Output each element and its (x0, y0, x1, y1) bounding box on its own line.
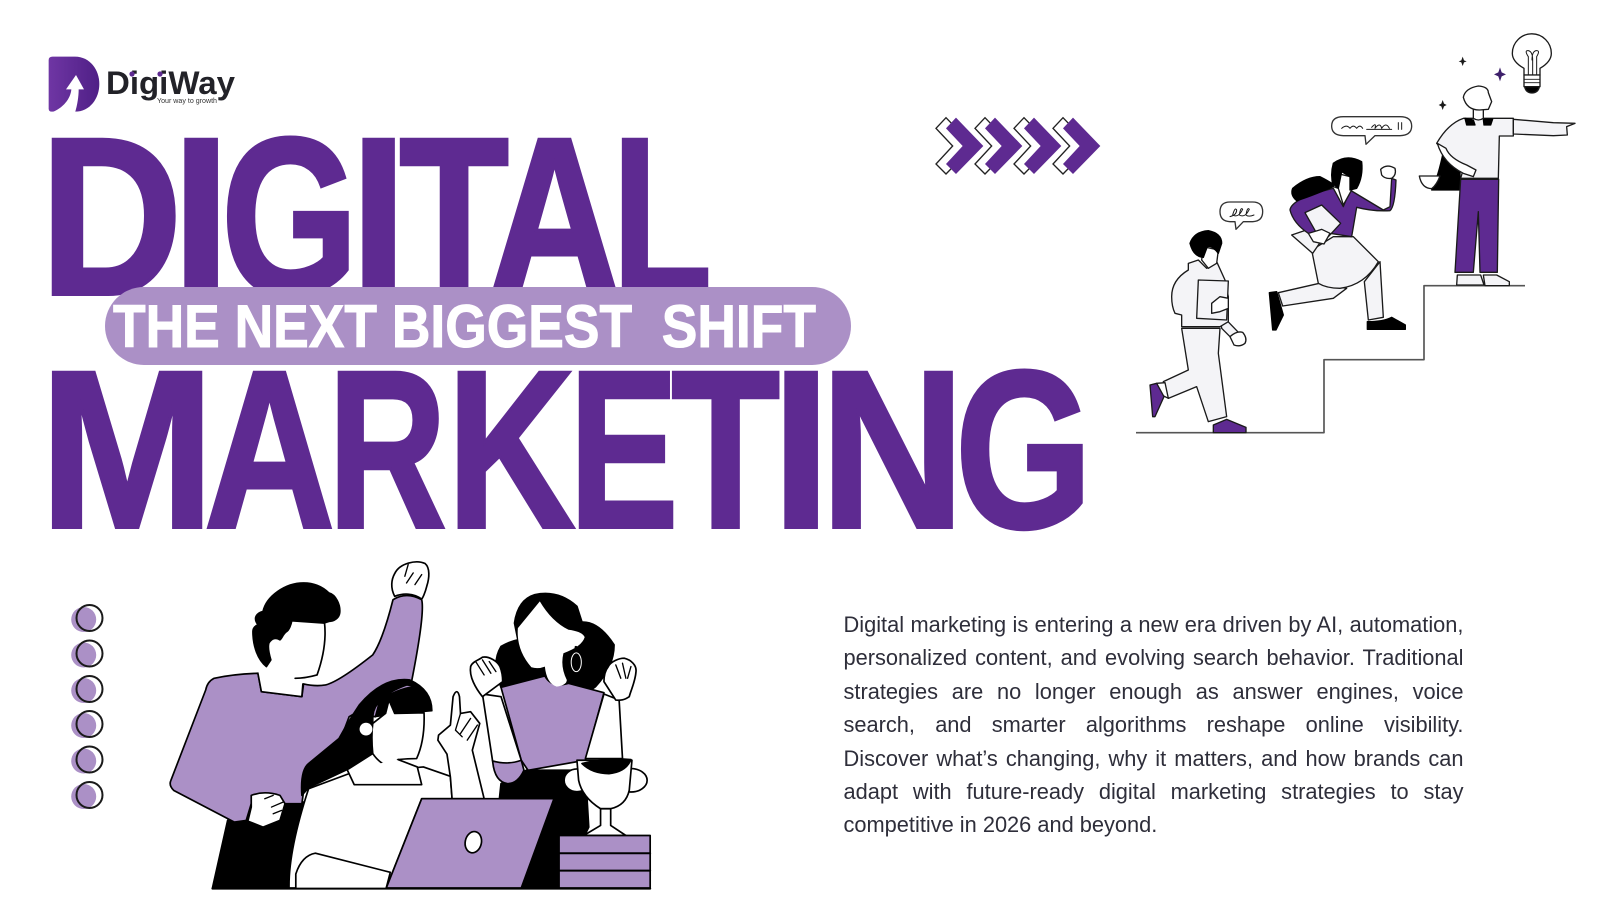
title word: MARKETING: R (328, 323, 446, 575)
body paragraph (844, 612, 1464, 837)
body paragraph: Digital marketing is entering a new era driven by AI, automation, (844, 612, 1464, 637)
body paragraph: strategies are no longer enough as answer engines, voice (844, 679, 1464, 704)
person 1 walking (1150, 231, 1246, 433)
man on the left (170, 562, 429, 888)
subtitle pill: THE NEXT BIGGEST SHIFT (113, 293, 816, 360)
title word: DIGITAL: I (350, 90, 407, 342)
person 3 pointing (1419, 86, 1575, 286)
illustration: team celebrating around laptop (170, 562, 650, 889)
icon: chevron arrows (936, 118, 1100, 174)
logo: DigiWay: DigiWay (106, 65, 235, 101)
woman on the right (470, 593, 636, 888)
speech bubble 2 (1332, 117, 1412, 144)
stairs (1136, 286, 1525, 433)
stack of books (559, 835, 650, 888)
title word: MARKETING: N (820, 323, 965, 575)
title word: DIGITAL: A (488, 90, 621, 342)
title word: DIGITAL: L (612, 90, 712, 342)
body paragraph: personalized content, and evolving search behavior. Traditional (844, 645, 1464, 670)
laptop (386, 799, 554, 888)
person 2 running (1269, 158, 1405, 330)
logo: DigiWay (49, 57, 235, 113)
girl at laptop (289, 680, 484, 888)
title word: DIGITAL: T (399, 90, 509, 342)
sparkles (1439, 57, 1506, 110)
title word: DIGITAL: G (221, 90, 358, 342)
body paragraph: search, and smarter algorithms reshape online visibility. (844, 712, 1464, 737)
icon: light bulb (1512, 34, 1551, 93)
ground line (212, 886, 650, 892)
title word: MARKETING: K (447, 323, 575, 575)
illustration: people climbing stairs (1136, 34, 1575, 433)
decorative dots column (71, 605, 102, 809)
title word: MARKETING: E (569, 323, 678, 575)
trophy (564, 759, 647, 835)
title word: MARKETING: M (40, 323, 215, 575)
title word: DIGITAL: D (40, 90, 182, 342)
title word: MARKETING: I (772, 323, 830, 575)
body paragraph: competitive in 2026 and beyond. (844, 812, 1157, 837)
title word: DIGITAL: I (172, 90, 230, 342)
body paragraph: Discover what’s changing, why it matters, and how brands can (844, 746, 1464, 771)
body paragraph: adapt with future-ready digital marketing strategies to stay (844, 779, 1464, 804)
logo: DigiWay: Your way to growth (157, 98, 217, 105)
title word: MARKETING: A (204, 323, 335, 575)
title word: MARKETING: T (671, 323, 780, 575)
title word: MARKETING: G (955, 323, 1092, 575)
speech bubble 1 (1220, 202, 1263, 229)
